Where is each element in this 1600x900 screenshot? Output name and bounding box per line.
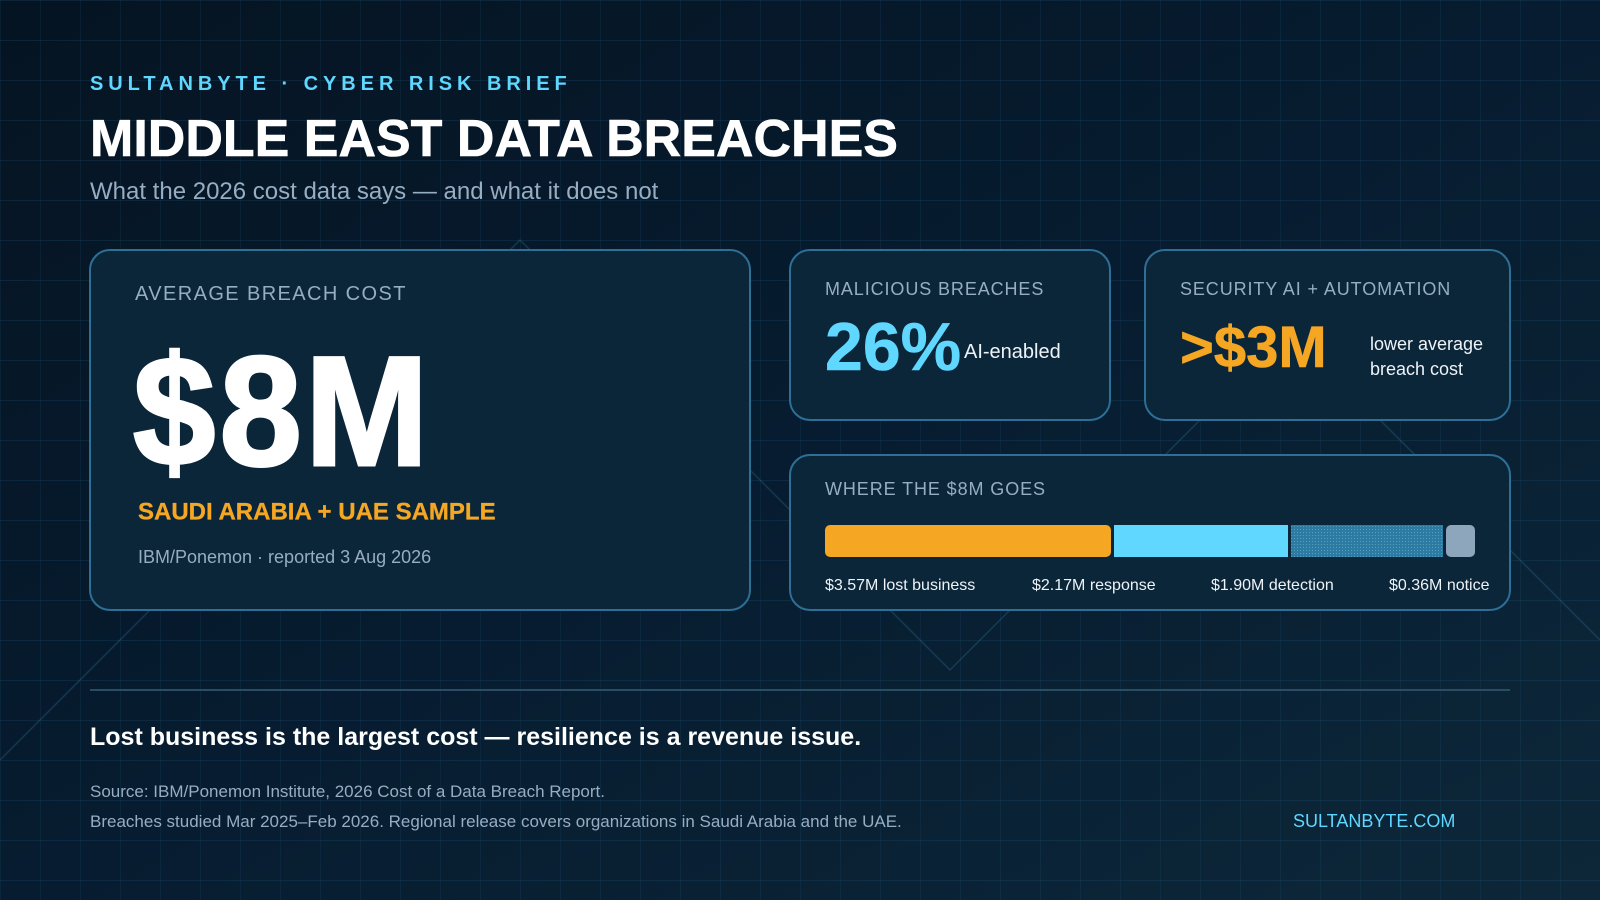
bar labels: $1.90M detection: [1211, 577, 1334, 594]
panel: security AI and automation: [1145, 250, 1510, 420]
label: malicious breaches: MALICIOUS BREACHES: [825, 279, 1044, 299]
panel: malicious breaches: [790, 250, 1110, 420]
bar labels: $3.57M lost business: [825, 577, 975, 594]
source note: [90, 782, 902, 831]
label: security AI: SECURITY AI + AUTOMATION: [1180, 279, 1451, 299]
panel: average breach cost: [90, 250, 750, 610]
website: SULTANBYTE.COM: [1293, 811, 1455, 831]
bar labels: $2.17M response: [1032, 577, 1156, 594]
stat: >$3M: >$3M: [1180, 315, 1327, 380]
attribution: IBM/Ponemon · reported 3 Aug 2026: [138, 547, 431, 567]
stacked bar chart: [825, 525, 1475, 557]
panel: where the $8M goes: [790, 455, 1510, 610]
source note: Breaches studied Mar 2025–Feb 2026. Regional release covers organizations in Saudi Arabia and the UAE.: [90, 812, 902, 831]
sample note: SAUDI ARABIA + UAE SAMPLE: [138, 498, 496, 526]
bar labels: [825, 577, 1490, 594]
title: MIDDLE EAST DATA BREACHES: [90, 110, 898, 168]
label: average breach cost: AVERAGE BREACH COST: [135, 283, 407, 305]
stat caption: lower average: [1370, 334, 1483, 354]
eyebrow: SULTANBYTE · CYBER RISK BRIEF: [90, 73, 572, 95]
stat: 26%: 26%: [825, 309, 961, 385]
subtitle: What the 2026 cost data says — and what it does not: [90, 178, 659, 205]
bar labels: $0.36M notice: [1389, 577, 1490, 594]
takeaway: Lost business is the largest cost — resilience is a revenue issue.: [90, 723, 861, 751]
stat caption: breach cost: [1370, 359, 1463, 379]
big number: $8M: $8M: [133, 325, 428, 499]
label: where the money goes: WHERE THE $8M GOES: [825, 479, 1046, 499]
source note: Source: IBM/Ponemon Institute, 2026 Cost of a Data Breach Report.: [90, 782, 605, 801]
stat caption: [1370, 334, 1483, 379]
stat caption: AI-enabled: [964, 341, 1061, 363]
